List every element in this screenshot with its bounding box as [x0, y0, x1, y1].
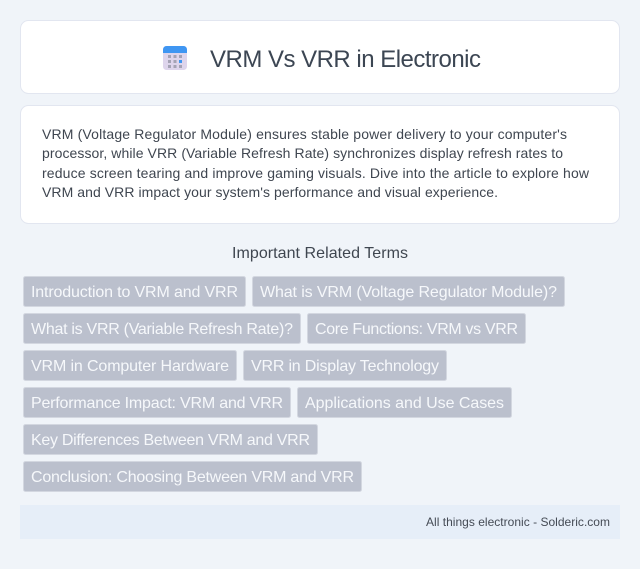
tag: VRM in Computer Hardware [24, 350, 236, 380]
tag: Conclusion: Conclusion: Choosing Between VRM and VRR [31, 469, 354, 486]
tag: Core Functions [308, 314, 526, 344]
tag: VRM in Computer Hardware: VRM in Computer Hardware [31, 358, 229, 375]
tag: Introduction [24, 276, 246, 306]
tag: Performance Impact: Performance Impact: VRM and VRR [31, 395, 283, 412]
tag: What is VRR [24, 314, 300, 344]
tag: Key Differences: Key Differences Between VRM and VRR [31, 432, 310, 449]
intro text line 3: reduce screen tearing and improve gaming visuals. Dive into the article to explore how [42, 165, 590, 181]
intro panel [20, 106, 620, 224]
related terms tags [24, 276, 564, 492]
intro text line 2: processor, while VRR (Variable Refresh Rate) synchronizes display refresh rates to [42, 145, 563, 161]
section heading: Important Related Terms [232, 245, 408, 262]
tag: VRR in Display Technology: VRR in Display Technology [251, 358, 439, 375]
tag: Applications: Applications and Use Cases [305, 395, 504, 412]
title: VRM Vs VRR in Electronic [210, 46, 481, 73]
tag: VRR in Display Technology [244, 350, 446, 380]
tag: Key Differences [24, 424, 318, 454]
intro text line 1: VRM (Voltage Regulator Module) ensures stable power delivery to your computer's [42, 126, 567, 142]
tag: Applications [298, 388, 512, 418]
intro text line 4: VRM and VRR impact your system's performance and visual experience. [42, 184, 498, 200]
header panel [20, 20, 620, 94]
footer credit: All things electronic - Solderic.com [426, 515, 610, 529]
tag: What is VRM [252, 276, 564, 306]
tag: Performance Impact [24, 388, 290, 418]
tag: What is VRM: What is VRM (Voltage Regulator Module)? [260, 284, 557, 301]
footer [20, 505, 620, 539]
tag: Introduction: Introduction to VRM and VRR [31, 284, 238, 301]
tag: What is VRR: What is VRR (Variable Refresh Rate)? [31, 321, 293, 338]
tag: Core Functions: Core Functions: VRM vs VRR [315, 321, 518, 338]
tag: Conclusion [24, 462, 362, 492]
icon: calendar [163, 46, 187, 70]
